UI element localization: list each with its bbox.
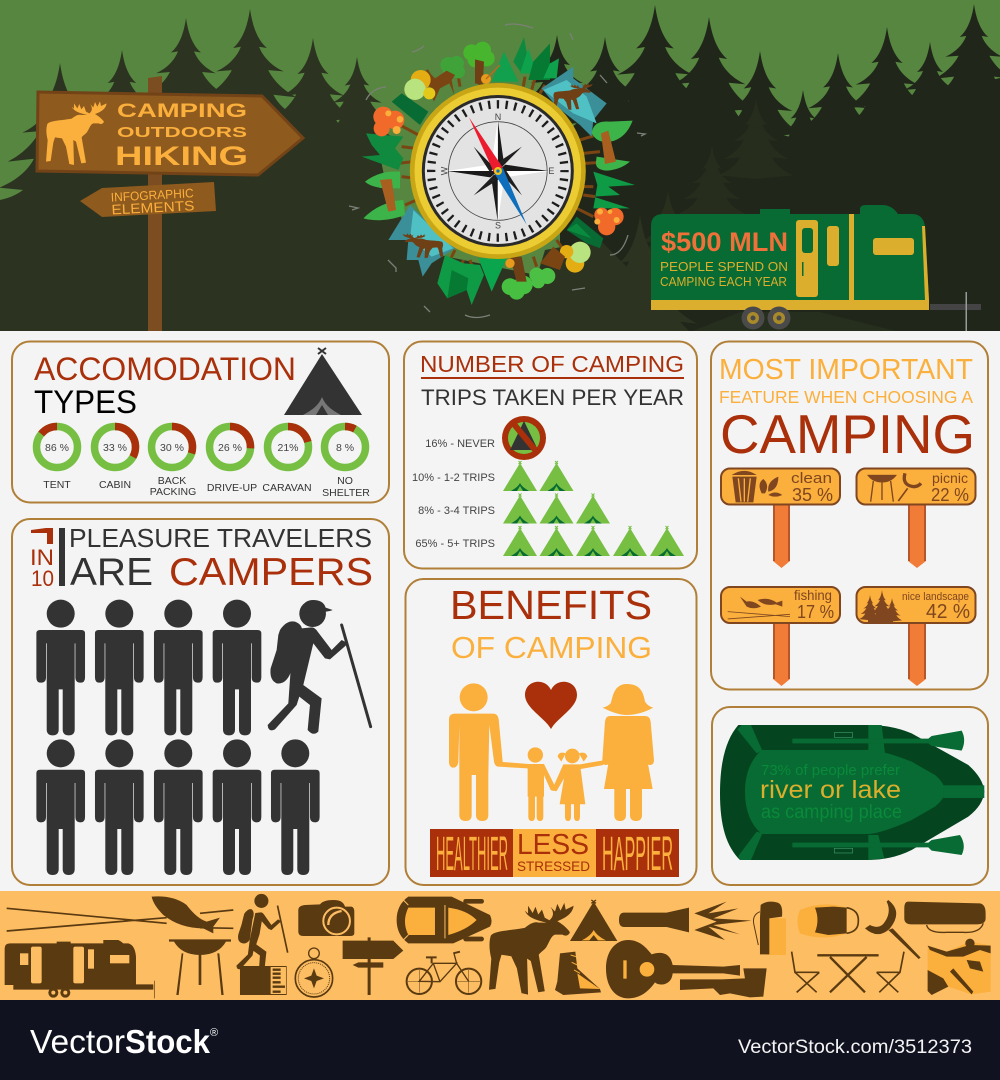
compass gold ring: [410, 83, 586, 259]
sign post: [148, 76, 162, 331]
icon: sleeping bag: [904, 902, 986, 932]
1 in 10 stat: [30, 528, 65, 591]
heading: are campers: [70, 551, 373, 594]
donut labels: TENT: [43, 479, 71, 491]
raft text: 73% of people prefer: [761, 762, 900, 779]
heading: accommodation: ACCOMODATION: [34, 351, 296, 387]
donut labels: PACKING: [150, 486, 196, 498]
trailer: [651, 205, 981, 331]
icon: boot: [555, 952, 601, 995]
son: [498, 747, 556, 821]
compass letters: N: [495, 112, 501, 122]
trip row labels: [412, 438, 495, 550]
footer bar: [0, 1000, 1000, 1080]
birds: [349, 24, 645, 318]
panel: benefits of camping: [406, 579, 696, 885]
trip row labels: 16% - NEVER: [425, 438, 495, 450]
infographic canvas: HAPPIER: [602, 828, 673, 881]
sign: nice landscape: [856, 587, 976, 686]
icon: guitar: [606, 940, 740, 998]
icon: raft small: [397, 895, 492, 945]
sign title: OUTDOORS: [117, 124, 247, 141]
icon: small compass: [295, 948, 333, 997]
mother: [602, 684, 654, 821]
icon: flashlight: [619, 902, 752, 940]
heading: camping: CAMPING: [720, 403, 975, 465]
icon: raft: [720, 725, 984, 860]
signpost: [37, 76, 303, 331]
donut: caravan 21%: 21%: [277, 442, 299, 454]
panel: pleasure travelers: [12, 519, 389, 885]
compass face: [425, 98, 571, 244]
donut labels: CARAVAN: [262, 482, 312, 494]
heading: pleasure travelers: PLEASURE TRAVELERS: [69, 523, 372, 553]
sign: fishing: [721, 587, 840, 686]
trailer text: [660, 227, 788, 289]
trip row labels: 10% - 1-2 TRIPS: [412, 472, 495, 484]
icon: matchbox: [240, 966, 287, 995]
compass rose: [447, 120, 548, 222]
panel: most important feature: [711, 342, 988, 690]
raft text: [760, 762, 902, 823]
wreath: upper right teal mountains: [542, 67, 607, 137]
donut: tent 86%: [28, 418, 86, 476]
icon: backpack: [753, 902, 786, 955]
trailer text: PEOPLE SPEND ON: [660, 259, 788, 274]
icon: tent small: [570, 900, 617, 941]
trailer wheels and hitch: [742, 292, 981, 331]
url text: VectorStock.com/3512373: [738, 1037, 972, 1058]
wreath: top trees: [463, 42, 495, 67]
compass: [410, 83, 586, 259]
sign: nice landscape: nice landscape: [902, 591, 969, 603]
page background: [0, 331, 1000, 891]
sign: fishing: fishing: [794, 588, 832, 603]
icon: moose large: [489, 903, 574, 995]
trailer stripes and windows: [651, 214, 929, 310]
icon: fishing rods: [7, 908, 233, 931]
donut: no shelter 8%: [324, 426, 366, 468]
donut: cabin 33%: [94, 426, 136, 468]
trip row labels: 8% - 3-4 TRIPS: [418, 505, 495, 517]
donut: no shelter 8%: 8 %: [336, 442, 354, 454]
forest right silhouette: [515, 4, 1000, 332]
compass letters: S: [495, 221, 501, 231]
raft text: river or lake: [760, 776, 901, 804]
icon: no tent: [502, 416, 546, 460]
donut labels: [43, 475, 370, 499]
heading: of camping: OF CAMPING: [451, 630, 652, 665]
panel: accommodation types: [12, 342, 389, 502]
panel: river or lake: [712, 707, 988, 885]
trailer body: [651, 205, 929, 300]
subheading: feature: FEATURE WHEN CHOOSING A: [719, 387, 973, 407]
donut: cabin 33%: 33 %: [103, 442, 127, 454]
trailer text: CAMPING EACH YEAR: [660, 274, 787, 289]
sign: clean: clean: [791, 470, 832, 487]
father: [449, 683, 503, 821]
icon: bicycle: [407, 952, 481, 994]
1 in 10 stat: IN: [30, 545, 54, 570]
compass ticks: [431, 104, 564, 238]
heading: most important: MOST IMPORTANT: [719, 354, 973, 386]
sign title: HIKING: [115, 141, 248, 171]
icon: sausage on fork: [865, 900, 921, 959]
compass letters: E: [548, 166, 554, 176]
logo: VectorStock: Vector: [30, 1023, 125, 1060]
panel: camping trips per year: [404, 342, 697, 568]
icon: trailer: [5, 940, 155, 998]
icon: map: [928, 939, 991, 995]
heading: types: TYPES: [34, 384, 137, 420]
icon: signpost small: [343, 937, 403, 995]
icon: table and chairs: [792, 952, 904, 992]
donut: backpacking 30%: 30 %: [160, 442, 184, 454]
people pictogram: [36, 600, 371, 875]
wreath: lower left teal mountains: [388, 205, 455, 277]
wreath: radial trunks: [398, 63, 600, 277]
sign: picnic: [856, 468, 976, 568]
icon: camera: [298, 900, 354, 936]
logo: VectorStock: Stock: [125, 1023, 211, 1060]
donut labels: NO: [337, 475, 353, 487]
logo: VectorStock: ®: [210, 1027, 218, 1039]
raft text: as camping place: [761, 802, 902, 823]
donut: drive-up 26%: 26 %: [218, 442, 242, 454]
donut labels: BACK: [158, 475, 186, 487]
wreath: right orange tree: [594, 208, 624, 235]
tent row 1-2 trips: [503, 461, 574, 491]
main arrow sign: [37, 92, 303, 175]
icon: tent: [284, 348, 362, 415]
sign: picnic: picnic: [932, 470, 968, 486]
icon: grill: [169, 939, 231, 995]
donut labels: SHELTER: [322, 487, 370, 499]
lighter background trees: [540, 174, 722, 331]
icon: axe: [680, 968, 767, 997]
sign: nice landscape: 42 %: [926, 601, 970, 623]
icon strip: [0, 891, 1000, 1000]
compass letters: [439, 112, 554, 231]
donut: caravan 21%: [268, 426, 308, 468]
sign: fishing: 17 %: [797, 602, 834, 622]
compass and wreath: [362, 37, 635, 305]
donut labels: CABIN: [99, 479, 131, 491]
icon: hiker small: [236, 894, 288, 971]
daughter: [553, 749, 603, 821]
trailer text: $500 MLN: [661, 227, 788, 257]
icon: sleeping mat: [797, 904, 858, 937]
benefits banner: STRESSED: [517, 858, 590, 874]
compass letters: W: [439, 166, 449, 175]
icon: heart: [525, 682, 577, 729]
heading: number of camping: NUMBER OF CAMPING: [420, 351, 684, 377]
sign title: CAMPING: [117, 101, 247, 122]
donut: backpacking 30%: [152, 426, 192, 468]
trip row labels: 65% - 5+ TRIPS: [415, 538, 495, 550]
tent row 5+ trips: [503, 526, 684, 556]
wreath: lower right canoe and tree: [567, 217, 603, 248]
wreath: left pines and clouds: [362, 133, 403, 170]
heading: are campers: CAMPERS: [169, 551, 373, 594]
sign title: [115, 101, 248, 171]
donut: tent 86%: 86 %: [45, 442, 69, 454]
donut labels: DRIVE-UP: [207, 482, 257, 494]
heading: are campers: ARE: [70, 551, 153, 594]
forest left silhouette: [0, 10, 534, 331]
donut: drive-up 26%: [210, 426, 250, 468]
wreath: bottom bushes: [529, 268, 555, 288]
family figure: [449, 683, 654, 821]
sign: clean: [721, 468, 840, 568]
logo: VectorStock: [30, 1023, 218, 1060]
header forest scene: [0, 0, 1000, 359]
wreath: bottom pines: [478, 258, 507, 292]
compass needle: [469, 117, 527, 225]
small arrow sign: ELEMENTS: [111, 197, 195, 218]
1 in 10 stat: 10: [31, 566, 54, 591]
moose icon: [46, 101, 107, 165]
icon: fish: [152, 896, 220, 933]
icon: hiker: [268, 600, 371, 734]
small arrow sign: INFOGRAPHIC: [110, 186, 194, 205]
wreath: left orange tree: [373, 107, 404, 136]
small arrow sign: [80, 182, 216, 218]
benefits banner: LESS: [517, 829, 589, 861]
tent row 3-4 trips: [503, 494, 610, 524]
wreath: right clouds and pines: [592, 121, 633, 142]
sign: picnic: 22 %: [931, 485, 969, 505]
sign: clean: 35 %: [792, 485, 833, 505]
benefits banner: HEALTHIER: [436, 828, 508, 881]
heading: benefits: BENEFITS: [450, 582, 652, 628]
heading: trips taken per year: TRIPS TAKEN PER YEAR: [421, 385, 684, 410]
